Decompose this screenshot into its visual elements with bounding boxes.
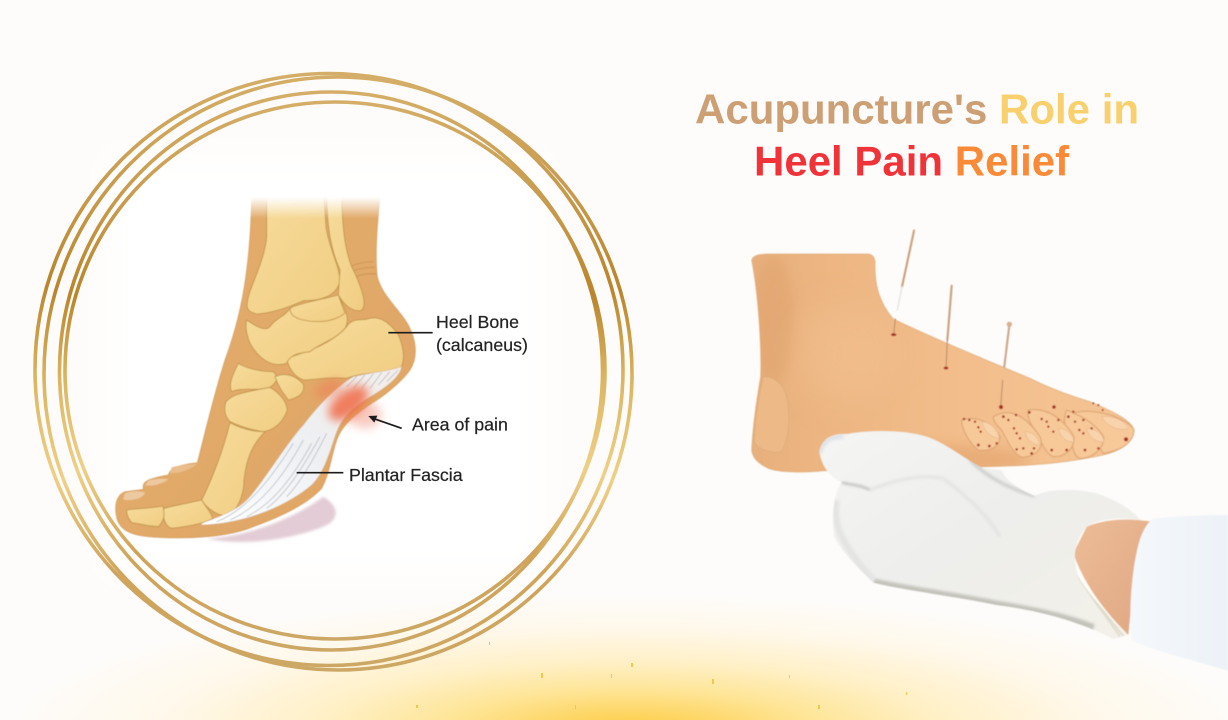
pain glow outside the heel	[348, 402, 382, 428]
leader lines and arrow	[297, 333, 433, 473]
leg and foot bones	[127, 197, 403, 528]
needles above foot	[897, 231, 1009, 380]
second toe nail	[145, 479, 168, 486]
cast shadow	[207, 497, 336, 542]
acupuncture foot model held by gloved hand	[752, 231, 1228, 671]
needle head	[1007, 322, 1012, 327]
third toe nail	[170, 464, 197, 473]
toe nails	[123, 491, 145, 500]
foot outline	[116, 197, 415, 538]
heel patch	[754, 377, 789, 452]
toe nails	[982, 416, 1128, 445]
label: area of pain: Area of pain	[412, 414, 508, 434]
needle tips entering foot	[894, 318, 1003, 407]
fascia fibres	[217, 370, 398, 522]
fade at top of leg	[243, 190, 387, 218]
foot model	[752, 254, 1134, 472]
title: Acupuncture's Role in	[695, 86, 1139, 132]
title: Heel Pain Relief	[754, 138, 1070, 184]
heel anatomy illustration	[116, 190, 433, 542]
area of pain redness	[312, 375, 375, 428]
glove	[819, 431, 1141, 639]
gold rings	[35, 74, 632, 670]
ankle crease lines	[352, 262, 376, 277]
forearm	[1073, 520, 1152, 635]
coat sleeve	[1130, 515, 1228, 671]
toes	[962, 410, 1134, 458]
glove shading and folds	[819, 437, 1123, 637]
foot shading	[753, 257, 1030, 475]
plantar fascia	[202, 367, 402, 525]
label: calcaneus: (calcaneus)	[436, 335, 528, 355]
label: heel bone: Heel Bone	[436, 312, 519, 332]
acupuncture points	[891, 333, 1128, 455]
label: plantar fascia: Plantar Fascia	[349, 465, 463, 485]
title	[695, 86, 1139, 184]
